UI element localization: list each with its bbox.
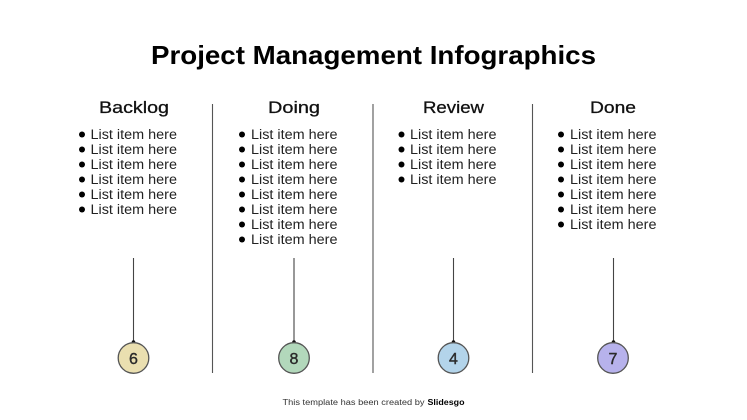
list: doing items: List item here	[251, 142, 338, 157]
list: backlog items: List item here	[90, 142, 177, 157]
heading: review: Review	[423, 98, 485, 117]
list: doing items: List item here	[251, 217, 338, 232]
list: doing items: List item here	[251, 232, 338, 247]
list: backlog items: List item here	[90, 157, 177, 172]
footer credit	[282, 398, 465, 407]
list: done items: List item here	[570, 172, 656, 187]
connector: done	[612, 258, 615, 344]
heading: doing: Doing	[268, 98, 320, 117]
list: backlog items: List item here	[90, 187, 177, 202]
heading: backlog: Backlog	[99, 98, 169, 117]
footer credit: Slidesgo	[428, 398, 465, 407]
list: done items	[558, 127, 656, 232]
connector: backlog	[132, 258, 135, 344]
divider 2	[372, 104, 374, 373]
count badge: done 7: 7	[609, 351, 618, 368]
list: done items: List item here	[570, 127, 656, 142]
list: done items: List item here	[570, 142, 656, 157]
list: review items: List item here	[410, 127, 496, 142]
list: done items: List item here	[570, 187, 656, 202]
count badge: review 4: 4	[449, 351, 458, 368]
list: backlog items	[79, 127, 177, 217]
count badge: backlog 6	[118, 343, 149, 373]
panel: backlog	[79, 98, 177, 373]
footer credit: This template has been created by	[282, 398, 424, 407]
list: doing items: List item here	[251, 172, 338, 187]
count badge: backlog 6: 6	[129, 351, 138, 368]
count badge: doing 8: 8	[290, 351, 299, 368]
panel: review	[398, 98, 496, 373]
count badge: doing 8	[279, 343, 309, 373]
list: doing items: List item here	[251, 127, 338, 142]
list: review items	[398, 127, 496, 187]
divider 1	[212, 104, 214, 373]
list: backlog items: List item here	[90, 127, 177, 142]
list: doing items: List item here	[251, 187, 338, 202]
connector: doing	[292, 258, 296, 344]
title: Project Management Infographics	[151, 40, 596, 70]
list: backlog items: List item here	[90, 172, 177, 187]
list: review items: List item here	[410, 157, 496, 172]
panel: doing	[239, 98, 338, 373]
count badge: done 7	[598, 343, 628, 373]
heading: done: Done	[590, 98, 636, 117]
list: doing items: List item here	[251, 157, 338, 172]
divider 3	[532, 104, 534, 373]
list: review items: List item here	[410, 172, 496, 187]
list: done items: List item here	[570, 202, 656, 217]
count badge: review 4	[438, 343, 469, 373]
list: doing items: List item here	[251, 202, 338, 217]
list: backlog items: List item here	[90, 202, 177, 217]
list: done items: List item here	[570, 217, 656, 232]
list: review items: List item here	[410, 142, 496, 157]
list: doing items	[239, 127, 338, 247]
panel: done	[558, 98, 656, 373]
list: done items: List item here	[570, 157, 656, 172]
connector: review	[452, 258, 455, 344]
